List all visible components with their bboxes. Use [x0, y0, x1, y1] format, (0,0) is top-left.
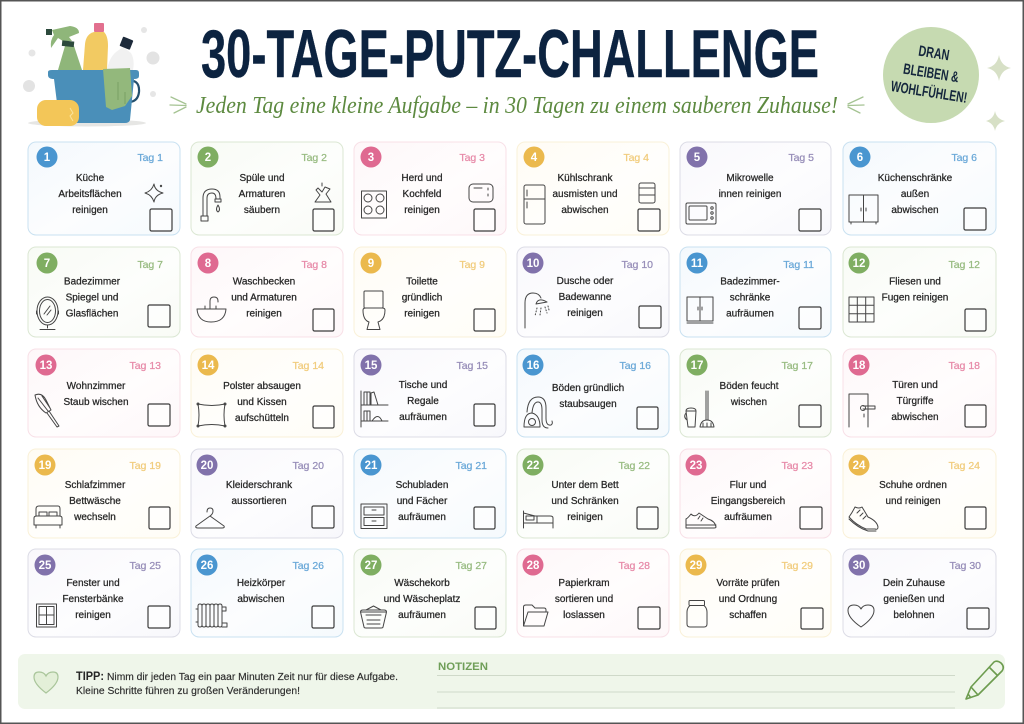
- card: day 25: Fenster und: [66, 578, 120, 589]
- card: day 12: Tag 12: [948, 259, 980, 271]
- card: day 18: abwischen: [891, 412, 939, 423]
- card: day 11: 11: [691, 258, 704, 270]
- card: day 16: [517, 349, 669, 437]
- card: day 24: Schuhe ordnen: [879, 480, 947, 491]
- card: day 23: aufräumen: [724, 512, 772, 523]
- card: day 15: Regale: [407, 396, 439, 407]
- card: day 25: reinigen: [75, 610, 111, 621]
- card: day 30: 30: [853, 560, 865, 572]
- card: day 2: Spüle und: [239, 173, 285, 184]
- card: day 15: Tische und: [399, 380, 447, 391]
- card: day 2: Tag 2: [301, 152, 327, 164]
- card: day 23: Eingangsbereich: [711, 496, 785, 507]
- decorative leaf marks: [170, 97, 864, 113]
- card: day 16: Tag 16: [619, 360, 651, 372]
- card: day 23: [680, 449, 831, 538]
- card: day 2: [191, 142, 343, 235]
- card: day 30: belohnen: [893, 610, 935, 621]
- card: day 22: und Schränken: [551, 496, 619, 507]
- card: day 19: wechseln: [73, 512, 116, 523]
- card: day 5: innen reinigen: [719, 189, 781, 200]
- card: day 22: reinigen: [567, 512, 603, 523]
- card: day 8: [191, 247, 343, 337]
- card: day 20: [191, 449, 343, 538]
- card: day 19: 19: [39, 460, 51, 472]
- card: day 8: Tag 8: [301, 259, 327, 271]
- card: day 6: abwischen: [891, 205, 939, 216]
- card: day 8: Waschbecken: [233, 276, 295, 288]
- illustration: cleaning bucket: [23, 23, 160, 126]
- card: day 20: 20: [201, 460, 213, 472]
- card: day 20: Kleiderschrank: [226, 480, 293, 491]
- card: day 16: Böden gründlich: [552, 383, 624, 394]
- card: day 9: reinigen: [404, 308, 440, 320]
- card: day 24: 24: [853, 460, 866, 472]
- card: day 8: 8: [205, 258, 212, 270]
- card: day 19: Schlafzimmer: [65, 480, 126, 491]
- card: day 6: Tag 6: [951, 152, 977, 164]
- card: day 21: und Fächer: [397, 496, 448, 507]
- card: day 22: Unter dem Bett: [551, 480, 619, 491]
- card: day 1: Arbeitsflächen: [58, 189, 122, 200]
- badge: BLEIBEN &: [902, 61, 960, 86]
- card: day 28: [517, 549, 669, 637]
- card: day 13: Tag 13: [129, 360, 161, 372]
- card: day 16: 16: [527, 360, 539, 372]
- badge: DRAN: [917, 43, 951, 64]
- card: day 4: 4: [531, 152, 538, 164]
- card: day 11: aufräumen: [726, 308, 774, 320]
- card: day 6: [843, 142, 996, 235]
- card: day 7: [28, 247, 180, 337]
- card: day 5: Tag 5: [788, 152, 814, 164]
- badge: WOHLFÜHLEN!: [890, 78, 968, 107]
- card: day 27: [354, 549, 506, 637]
- card: day 10: Badewanne: [559, 292, 612, 303]
- card: day 6: Küchenschränke: [878, 173, 953, 184]
- card: day 1: [28, 142, 180, 235]
- card: day 28: Tag 28: [618, 560, 650, 572]
- tip text: Nimm dir jeden Tag ein paar Minuten Zeit nur für diese Aufgabe.: [107, 672, 398, 683]
- card: day 26: Heizkörper: [237, 578, 286, 589]
- card: day 28: sortieren und: [555, 594, 613, 605]
- card: day 23: 23: [690, 460, 702, 472]
- card: day 15: Tag 15: [456, 360, 488, 372]
- card: day 17: [680, 349, 831, 437]
- card: day 14: und Kissen: [237, 397, 287, 408]
- card: day 15: 15: [365, 360, 378, 372]
- card: day 4: Tag 4: [623, 152, 649, 164]
- card: day 18: [843, 349, 996, 437]
- card: day 1: reinigen: [72, 205, 108, 216]
- card: day 25: 25: [39, 560, 52, 572]
- card: day 18: Tag 18: [948, 360, 980, 372]
- card: day 3: [354, 142, 506, 235]
- card: day 19: Bettwäsche: [69, 496, 121, 507]
- card: day 23: Tag 23: [781, 460, 813, 472]
- card: day 20: Tag 20: [292, 460, 324, 472]
- card: day 30: Dein Zuhause: [883, 578, 946, 589]
- card: day 12: Fugen reinigen: [882, 292, 948, 304]
- card: day 21: 21: [365, 460, 378, 472]
- card: day 11: Tag 11: [783, 259, 814, 271]
- card: day 11: schränke: [730, 292, 771, 304]
- sparkles: [986, 55, 1011, 131]
- card: day 24: Tag 24: [948, 460, 980, 472]
- subtitle: Jeden Tag eine kleine Aufgabe – in 30 Tagen zu einem sauberen Zuhause!: [196, 93, 838, 119]
- card: day 3: 3: [368, 152, 374, 164]
- card: day 26: abwischen: [237, 594, 285, 605]
- card: day 14: 14: [202, 360, 215, 372]
- card: day 5: Mikrowelle: [726, 173, 774, 184]
- card: day 17: Tag 17: [781, 360, 813, 372]
- card: day 14: [191, 349, 343, 437]
- panel: tip and notes: [18, 654, 1005, 709]
- card: day 17: Böden feucht: [720, 381, 779, 392]
- card: day 7: Tag 7: [137, 259, 163, 271]
- card: day 8: reinigen: [246, 308, 282, 320]
- card: day 4: Kühlschrank: [557, 173, 614, 184]
- card: day 11: Badezimmer-: [720, 276, 780, 288]
- card: day 23: Flur und: [730, 480, 766, 491]
- card: day 25: Tag 25: [129, 560, 161, 572]
- icon: heart: [34, 672, 58, 693]
- card: day 18: 18: [853, 360, 866, 372]
- card: day 19: [28, 449, 180, 538]
- card: day 29: 29: [690, 560, 702, 572]
- card: day 14: Tag 14: [292, 360, 324, 372]
- tip text line 2: Kleine Schritte führen zu großen Veränderungen!: [76, 686, 300, 697]
- card: day 28: Papierkram: [558, 578, 610, 589]
- card: day 13: 13: [40, 360, 52, 372]
- card: day 14: Polster absaugen: [223, 381, 301, 392]
- card: day 3: Kochfeld: [403, 189, 441, 200]
- card: day 7: 7: [44, 258, 50, 270]
- card: day 2: 2: [205, 152, 211, 164]
- card: day 8: und Armaturen: [231, 292, 297, 304]
- card: day 29: Vorräte prüfen: [716, 578, 780, 589]
- card: day 13: [28, 349, 180, 437]
- card: day 10: 10: [527, 258, 539, 270]
- card: day 3: Tag 3: [459, 152, 485, 164]
- card: day 27: aufräumen: [398, 610, 446, 621]
- card: day 10: Tag 10: [621, 259, 653, 271]
- card: day 9: [354, 247, 506, 337]
- card: day 30: [843, 549, 996, 637]
- card: day 1: 1: [44, 152, 51, 164]
- card: day 26: [191, 549, 343, 637]
- tip label: TIPP:: [76, 671, 104, 683]
- card: day 18: Türen und: [892, 380, 938, 391]
- card: day 21: Tag 21: [455, 460, 487, 472]
- card: day 2: Armaturen: [239, 189, 285, 200]
- card: day 14: aufschütteln: [235, 413, 289, 424]
- card: day 25: Fensterbänke: [62, 594, 124, 605]
- card: day 17: wischen: [730, 397, 767, 408]
- card: day 5: 5: [694, 152, 701, 164]
- card: day 27: und Wäscheplatz: [384, 594, 460, 605]
- card: day 10: Dusche oder: [557, 276, 614, 287]
- card: day 27: 27: [365, 560, 377, 572]
- notes heading: NOTIZEN: [438, 661, 488, 673]
- card: day 13: Wohnzimmer: [67, 381, 126, 392]
- card: day 10: reinigen: [567, 308, 603, 319]
- card: day 2: säubern: [244, 205, 280, 216]
- card: day 30: Tag 30: [949, 560, 981, 572]
- card: day 1: Küche: [76, 173, 105, 184]
- card: day 21: [354, 449, 506, 538]
- card: day 1: Tag 1: [137, 152, 163, 164]
- card: day 16: staubsaugen: [559, 399, 617, 410]
- card: day 24: und reinigen: [885, 496, 941, 507]
- card: day 5: [680, 142, 831, 235]
- card: day 27: Tag 27: [455, 560, 487, 572]
- card: day 7: Glasflächen: [66, 308, 118, 320]
- card: day 9: Tag 9: [459, 259, 485, 271]
- card: day 28: loslassen: [563, 610, 605, 621]
- card: day 11: [680, 247, 831, 337]
- card: day 29: schaffen: [729, 610, 767, 621]
- card: day 25: [28, 549, 180, 637]
- card: day 3: Herd und: [401, 173, 443, 184]
- card: day 9: 9: [368, 258, 374, 270]
- card: day 10: [517, 247, 669, 337]
- card: day 15: [354, 349, 506, 437]
- card: day 9: Toilette: [406, 276, 438, 288]
- card: day 9: gründlich: [402, 292, 442, 304]
- card: day 29: Tag 29: [781, 560, 813, 572]
- card: day 22: 22: [527, 460, 539, 472]
- card: day 21: Schubladen: [396, 480, 448, 491]
- card: day 21: aufräumen: [398, 512, 446, 523]
- card: day 12: Fliesen und: [889, 276, 941, 288]
- card: day 3: reinigen: [404, 205, 440, 216]
- card: day 19: Tag 19: [129, 460, 161, 472]
- card: day 4: [517, 142, 669, 235]
- card: day 12: 12: [853, 258, 865, 270]
- badge: [883, 27, 979, 123]
- card: day 30: genießen und: [883, 594, 945, 605]
- card: day 24: [843, 449, 996, 538]
- card: day 29: und Ordnung: [719, 594, 777, 605]
- card: day 15: aufräumen: [399, 412, 447, 423]
- card: day 12: [843, 247, 996, 337]
- card: day 7: Badezimmer: [64, 276, 121, 288]
- card: day 26: Tag 26: [292, 560, 324, 572]
- card: day 6: außen: [901, 189, 929, 200]
- card: day 22: Tag 22: [618, 460, 650, 472]
- card: day 4: abwischen: [561, 205, 609, 216]
- card: day 28: 28: [527, 560, 540, 572]
- card: day 7: Spiegel und: [66, 292, 118, 304]
- card: day 6: 6: [857, 152, 863, 164]
- card: day 13: Staub wischen: [63, 397, 129, 408]
- card: day 29: [680, 549, 831, 637]
- icon: pencil: [966, 661, 1003, 699]
- card: day 17: 17: [691, 360, 703, 372]
- card: day 20: aussortieren: [231, 496, 287, 507]
- card: day 4: ausmisten und: [552, 189, 618, 200]
- card: day 27: Wäschekorb: [394, 578, 450, 589]
- card: day 18: Türgriffe: [896, 396, 934, 407]
- card: day 26: 26: [201, 560, 213, 572]
- card: day 22: [517, 449, 669, 538]
